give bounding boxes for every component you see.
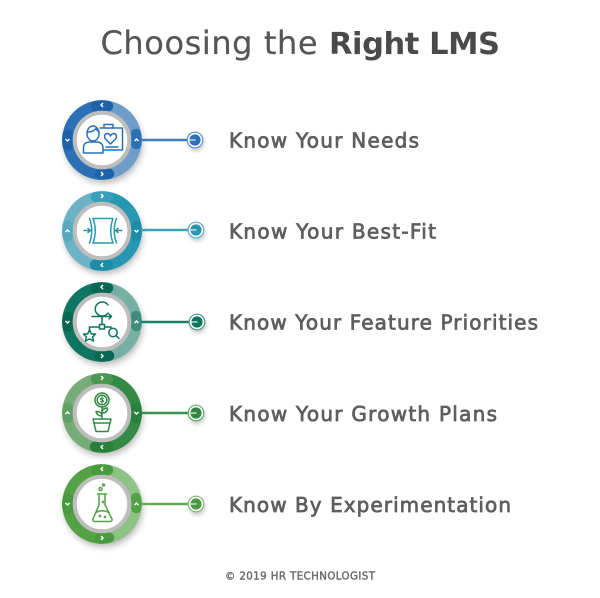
connector with node 2: [141, 222, 205, 241]
connector with node 5: [141, 496, 205, 515]
label 3: Know Your Feature Priorities: [229, 310, 538, 334]
icon: flask: [93, 484, 112, 522]
item: Know Your Feature Priorities: [64, 285, 538, 365]
connector with node 3: [141, 314, 206, 333]
label 4: Know Your Growth Plans: [229, 402, 497, 426]
ring badge 5: [64, 467, 142, 547]
icon: squeezed box with arrows: [84, 218, 122, 243]
ring badge 1: [64, 103, 142, 183]
title: Choosing the: [100, 24, 318, 62]
item: Know Your Growth Plans: [64, 376, 497, 456]
label 2: Know Your Best-Fit: [229, 220, 436, 244]
item: Know By Experimentation: [64, 467, 511, 547]
ring badge 3: [64, 285, 142, 365]
icon: person with heart clipboard: [84, 124, 122, 153]
title: Right LMS: [329, 27, 500, 62]
connector with node 4: [141, 405, 205, 424]
item: Know Your Needs: [64, 103, 419, 183]
ring badge 4: [64, 376, 142, 456]
copyright footer: © 2019 HR TECHNOLOGIST: [225, 570, 376, 582]
icon: workflow with star and magnifier: [84, 302, 119, 341]
label 5: Know By Experimentation: [229, 493, 511, 517]
title: [100, 24, 500, 62]
label 1: Know Your Needs: [229, 128, 419, 152]
icon: money plant in pot: [93, 393, 111, 432]
ring badge 2: [64, 194, 142, 274]
item: Know Your Best-Fit: [64, 194, 436, 274]
connector with node 1: [141, 132, 204, 151]
